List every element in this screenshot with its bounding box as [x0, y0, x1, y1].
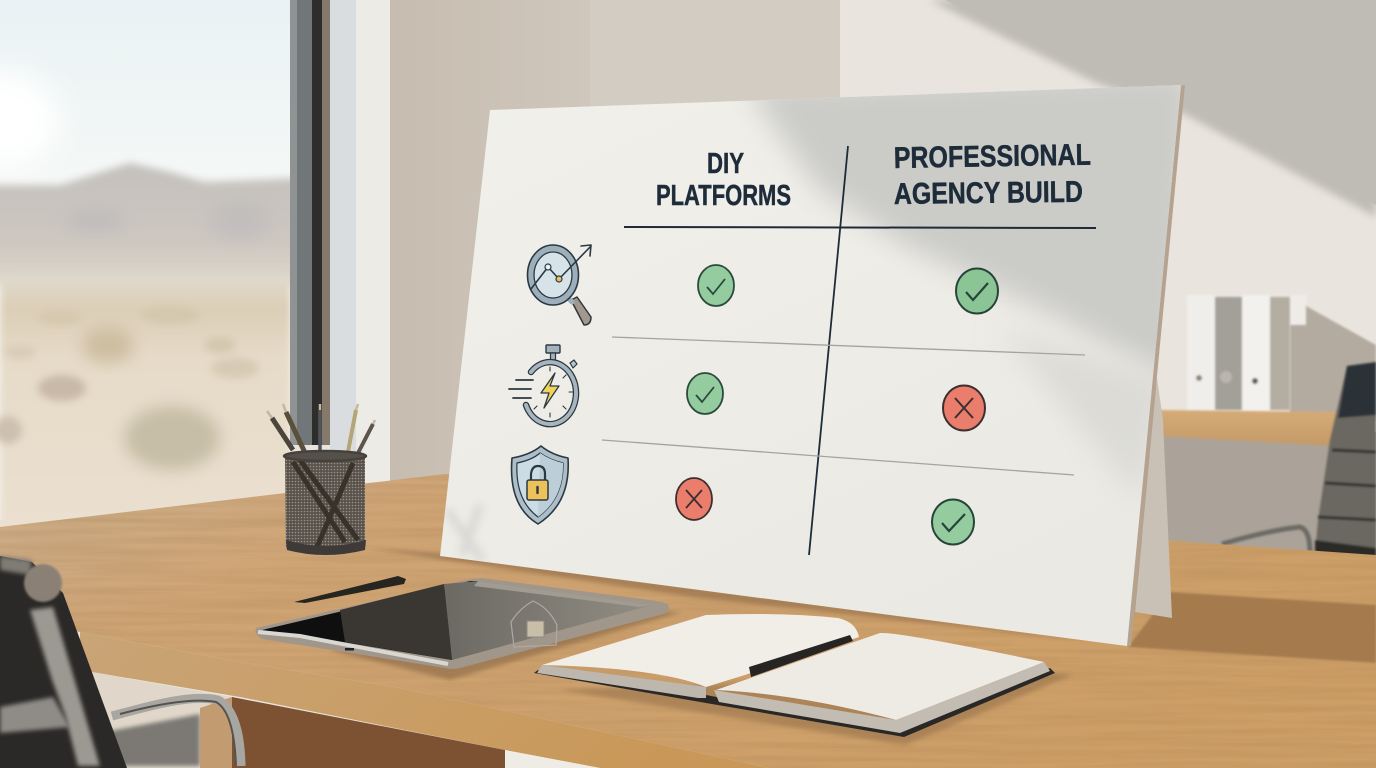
board shadow on desk — [366, 548, 1376, 663]
notebook shadow — [560, 672, 1072, 745]
desk support panel — [200, 697, 505, 768]
icon: magnifier with growth chart — [528, 245, 591, 325]
icon: shield with padlock — [512, 446, 568, 524]
comparison board — [440, 70, 1195, 646]
status: DIY check row one — [698, 265, 734, 306]
stand behind board — [1126, 378, 1172, 646]
pen in fold — [749, 635, 853, 677]
status: DIY cross row three — [676, 478, 712, 520]
window frame — [290, 0, 390, 482]
left page block — [537, 665, 706, 698]
window with desert view — [0, 0, 300, 540]
Professional Agency Build column heading: PROFESSIONAL — [894, 139, 1091, 175]
DIY column heading: DIY — [707, 148, 744, 180]
stylus pen — [294, 576, 406, 603]
tablet screen dark side — [262, 581, 478, 660]
status: agency cross row two — [943, 386, 985, 430]
wood grain — [0, 470, 1376, 768]
mesh cup body — [285, 456, 365, 553]
table lines — [602, 146, 1096, 555]
right page — [716, 633, 1044, 720]
floor below the desk — [60, 670, 600, 768]
status: agency check row three — [932, 500, 974, 544]
mountains — [0, 163, 300, 285]
DIY column heading: PLATFORMS — [656, 180, 791, 212]
tablet — [256, 578, 682, 680]
DIY column heading — [656, 148, 791, 212]
board edge — [1125, 85, 1185, 646]
desert floor — [0, 278, 291, 540]
board shadow bands — [447, 70, 1195, 560]
wooden shelf — [1158, 410, 1338, 446]
Professional Agency Build column heading: AGENCY BUILD — [894, 176, 1083, 211]
tablet shadow — [330, 610, 682, 680]
right page block — [714, 662, 1050, 733]
desk front edge — [80, 632, 769, 768]
tablet silver edge — [258, 632, 448, 664]
open notebook — [534, 614, 1072, 745]
desk surface — [0, 474, 1376, 768]
status: DIY check row two — [687, 373, 723, 414]
icon: stopwatch with lightning bolt — [509, 345, 577, 424]
status: agency check row one — [956, 268, 998, 314]
pencils — [267, 404, 375, 458]
binders on shelf — [1187, 295, 1306, 417]
right office chair — [1222, 362, 1376, 558]
left office chair — [0, 556, 241, 768]
board face — [440, 85, 1181, 646]
notebook cover — [534, 668, 1055, 737]
pencil cup — [267, 404, 375, 555]
left page — [542, 614, 859, 687]
tablet body — [256, 578, 669, 669]
desert shrubs — [0, 306, 259, 470]
tablet screen reflection side — [444, 581, 652, 660]
reflected shield — [511, 601, 557, 647]
Professional Agency Build column heading — [894, 139, 1091, 211]
